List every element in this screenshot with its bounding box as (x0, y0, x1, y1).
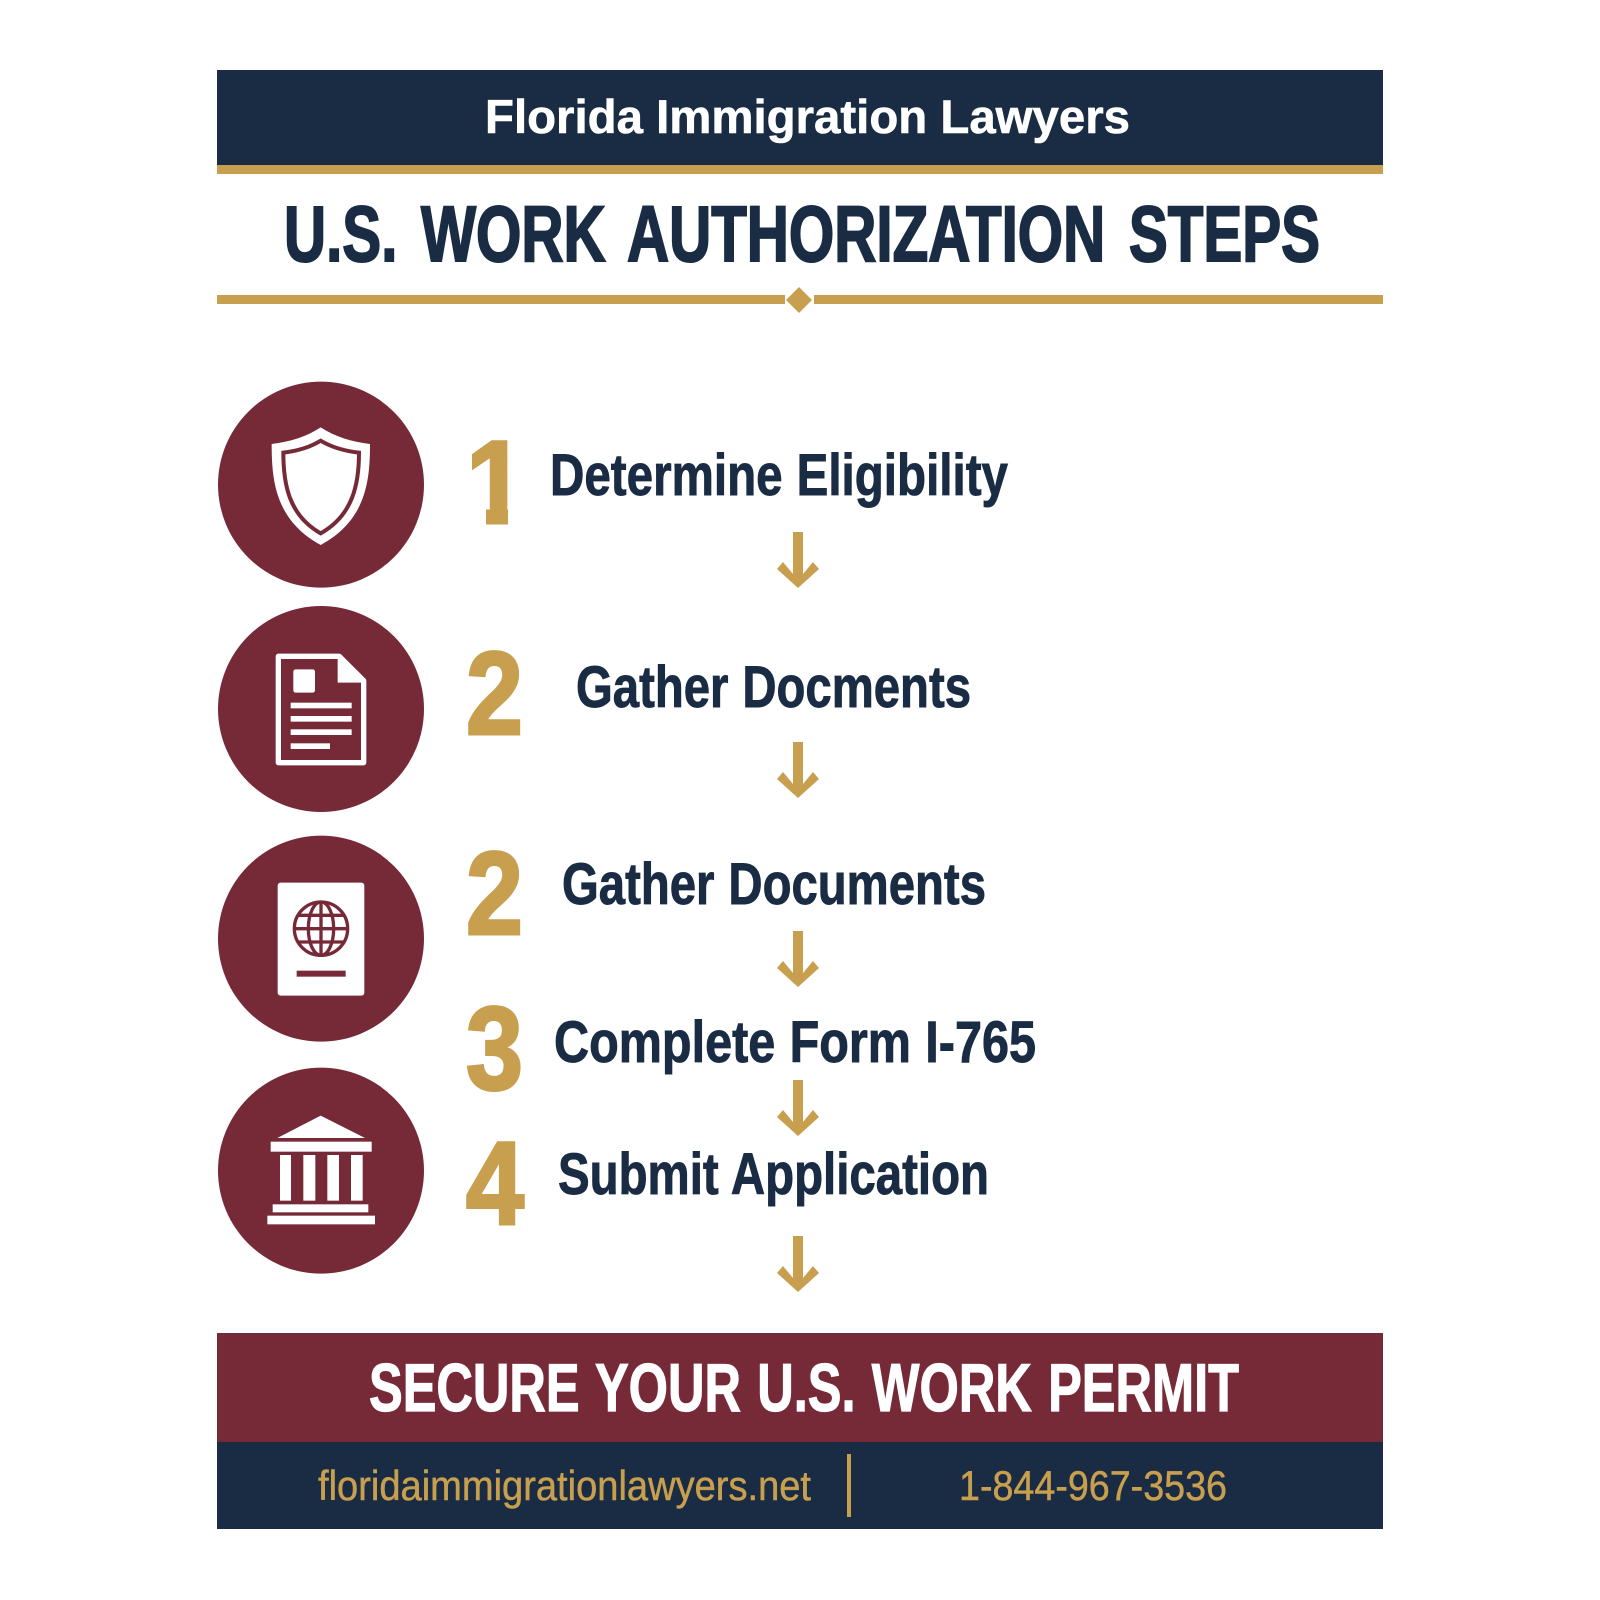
step number 2 repeated: 2 (466, 828, 523, 960)
step number 2: 2 (466, 628, 523, 760)
step label: Complete Form I-765: Complete Form I-765 (554, 1010, 1036, 1075)
website: floridaimmigrationlawyers.net (318, 1462, 811, 1509)
arrow 3 (777, 931, 819, 987)
step label: Determine Eligibility: Determine Eligibility (550, 443, 1008, 508)
firm name: Florida Immigration Lawyers (485, 90, 1130, 143)
step label: Gather Docments: Gather Docments (576, 655, 971, 720)
header banner (217, 70, 1383, 174)
call to action banner (217, 1333, 1383, 1442)
arrow 4 (777, 1080, 819, 1136)
step number 1: 1 (466, 417, 526, 549)
icon: shield (218, 382, 424, 588)
arrow 1 (777, 532, 819, 588)
icon: document (218, 606, 424, 812)
call to action text: SECURE YOUR U.S. WORK PERMIT (369, 1350, 1239, 1426)
step number 3: 3 (466, 983, 523, 1115)
contact footer (217, 1442, 1383, 1529)
icon: passport (218, 836, 424, 1042)
title divider with diamond (217, 287, 1383, 313)
step number 4: 4 (466, 1118, 524, 1250)
step label: Submit Application: Submit Application (558, 1142, 989, 1207)
icon: government building (218, 1068, 424, 1274)
step label: Gather Documents: Gather Documents (562, 852, 986, 917)
arrow 5 (777, 1236, 819, 1292)
phone number: 1-844-967-3536 (959, 1462, 1227, 1509)
arrow 2 (777, 742, 819, 798)
